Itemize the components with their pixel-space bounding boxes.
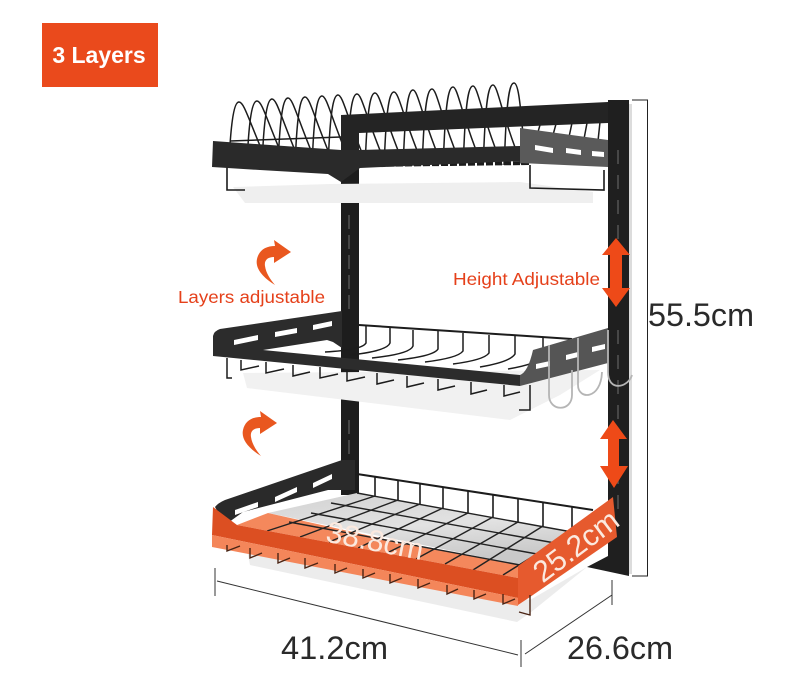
orange overlay: front face: [212, 507, 518, 598]
wire plate loops: [229, 83, 600, 165]
badge: 3 Layers: [42, 23, 158, 87]
wire floor mesh: [267, 493, 572, 575]
front panel: [212, 141, 520, 182]
label: 25.2cm: 25.2cm: [527, 504, 626, 589]
middle rack: [213, 311, 632, 420]
under-panel wires: [227, 163, 604, 190]
height arrow: lower: [600, 420, 628, 488]
tray: top layer: [233, 182, 593, 203]
tray: middle layer: [243, 370, 600, 420]
dimension: 55.5cm height: 55.5cm: [648, 297, 754, 333]
orange overlay: light floor band: [237, 513, 520, 580]
rear left upright: [341, 170, 359, 495]
height arrow: upper: [602, 238, 630, 307]
silver hooks: [549, 330, 632, 408]
bottom rack: [212, 460, 626, 622]
dimension: 55.5cm height: [632, 100, 754, 576]
dimension: 26.6cm depth: [525, 580, 673, 666]
top rack: [212, 83, 608, 203]
dimension: 41.2cm width: 41.2cm: [281, 630, 388, 666]
right upright with base: [587, 100, 632, 576]
label: 38.8cm: 38.8cm: [323, 516, 426, 567]
badge: 3 Layers: 3 Layers: [52, 42, 146, 68]
dimension: 41.2cm width: [215, 568, 521, 667]
orange overlay: side: [518, 497, 617, 605]
right bracket: [520, 328, 608, 386]
wire floor background: [268, 493, 572, 565]
curved arrow: upper: [257, 240, 291, 285]
left bracket: [213, 311, 342, 355]
right side bracket: [520, 128, 608, 167]
left bracket: [215, 460, 355, 525]
front panel: [213, 345, 520, 386]
wire dividers and hooks: [227, 325, 572, 410]
wire back wall: [357, 474, 593, 532]
back rail: [341, 102, 608, 170]
tray: bottom layer: [247, 550, 587, 622]
curved arrow: lower: [243, 411, 277, 456]
small hooks: [227, 545, 530, 615]
dimension: 26.6cm depth: 26.6cm: [567, 630, 673, 666]
label: Layers adjustable: Layers adjustable: [178, 287, 325, 307]
label: Height Adjustable: Height Adjustable: [453, 269, 600, 289]
